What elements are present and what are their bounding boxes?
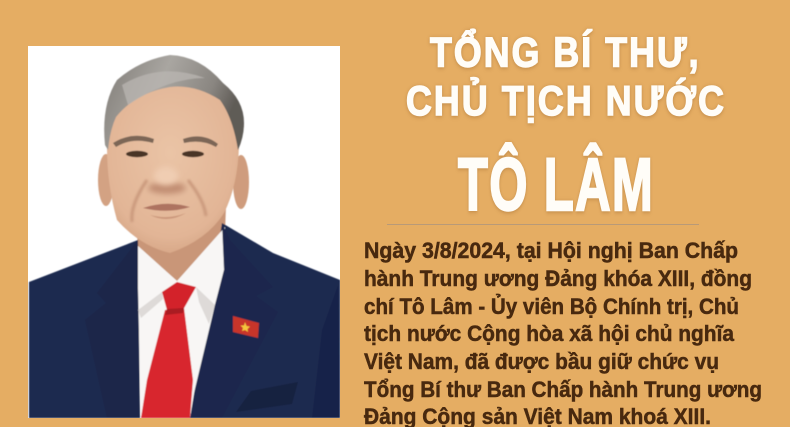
eyes	[126, 151, 148, 157]
body paragraph	[364, 238, 762, 427]
divider	[387, 224, 699, 225]
brows	[113, 136, 154, 147]
lapels	[136, 244, 140, 416]
body paragraph: chí Tô Lâm - Ủy viên Bộ Chính trị, Chủ	[364, 294, 739, 319]
body paragraph: Ngày 3/8/2024, tại Hội nghị Ban Chấp	[364, 238, 738, 263]
body paragraph: tịch nước Cộng hòa xã hội chủ nghĩa	[364, 321, 734, 346]
title: line 1: TỔNG BÍ THƯ,	[430, 28, 699, 76]
face	[107, 80, 239, 253]
title: line 2: CHỦ TỊCH NƯỚC	[406, 77, 724, 125]
face shading	[132, 180, 147, 222]
suit jacket	[29, 223, 340, 418]
ears	[98, 154, 114, 206]
mouth	[143, 204, 190, 211]
shirt	[137, 227, 225, 418]
body paragraph: Việt Nam, đã được bầu giữ chức vụ	[364, 349, 719, 374]
nose	[148, 182, 186, 194]
portrait photo	[28, 46, 340, 418]
lapel pin	[233, 316, 259, 338]
collar shadow	[138, 287, 215, 324]
name heading: TÔ LÂM	[458, 143, 653, 227]
body paragraph: hành Trung ương Đảng khóa XIII, đồng	[364, 266, 752, 291]
tie	[141, 282, 196, 418]
jacket shadows	[236, 382, 298, 412]
hair	[104, 55, 244, 150]
body paragraph: Tổng Bí thư Ban Chấp hành Trung ương	[364, 377, 762, 402]
neck	[136, 205, 226, 281]
